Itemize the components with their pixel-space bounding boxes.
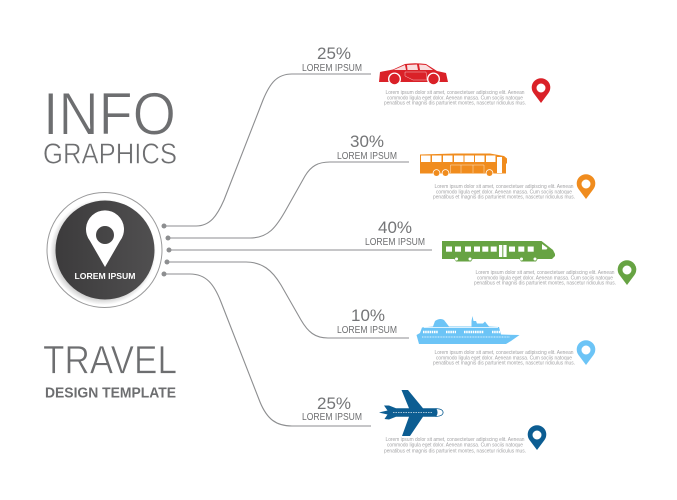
icon: train [442,241,555,262]
item 1: car [302,44,550,106]
description: commodo ligula eget dolor. Aenean massa. Cum sociis natoque [477,275,613,281]
icon: bus [420,154,507,177]
percentage: 25% [317,44,351,63]
item 2: bus [337,132,595,200]
title: INFO GRAPHICS: GRAPHICS [43,138,177,170]
description [384,90,526,106]
description: Lorem ipsum dolor sit amet, consectetuer adipiscing elit. Aenean [386,437,525,443]
icon: green pin [618,260,636,285]
icon: red pin [532,78,550,103]
description: commodo ligula eget dolor. Aenean massa. Cum sociis natoque [387,442,523,448]
label: LOREM IPSUM [302,412,362,423]
label: LOREM IPSUM [302,63,362,74]
description: Lorem ipsum dolor sit amet, consectetuer adipiscing elit. Aenean [386,90,525,96]
icon: ship [416,316,520,344]
icon: car [379,63,448,86]
percentage: 10% [351,306,385,325]
badge label: LOREM IPSUM [74,272,136,281]
description [474,270,616,286]
connector lines [162,74,432,426]
item 3: train [365,218,636,286]
icon: location pin [86,210,124,267]
icon: orange pin [577,174,595,199]
percentage: 30% [350,132,384,151]
description [433,184,575,200]
title: TRAVEL DESIGN TEMPLATE: TRAVEL [43,338,177,382]
label: LOREM IPSUM [337,325,397,336]
description: penatibus et magnis dis parturient montes, nascetur ridiculus mus. [433,194,575,200]
title: TRAVEL DESIGN TEMPLATE: DESIGN TEMPLATE [45,386,176,402]
label: LOREM IPSUM [337,151,397,162]
description: Lorem ipsum dolor sit amet, consectetuer adipiscing elit. Aenean [434,184,574,190]
description: Lorem ipsum dolor sit amet, consectetuer adipiscing elit. Aenean [434,350,574,356]
central badge [47,192,162,308]
description: penatibus et magnis dis parturient montes, nascetur ridiculus mus. [433,360,575,366]
description: penatibus et magnis dis parturient montes, nascetur ridiculus mus. [384,100,526,106]
label: LOREM IPSUM [365,237,425,248]
description: penatibus et magnis dis parturient montes, nascetur ridiculus mus. [384,448,526,454]
percentage: 40% [378,218,412,237]
icon: light blue pin [577,340,595,365]
percentage: 25% [317,394,351,413]
icon: dark blue pin [528,425,546,450]
description: penatibus et magnis dis parturient montes, nascetur ridiculus mus. [474,280,616,286]
description: Lorem ipsum dolor sit amet, consectetuer adipiscing elit. Aenean [476,270,615,276]
title: TRAVEL DESIGN TEMPLATE [43,338,177,402]
description [384,437,526,454]
icon: plane [379,390,444,436]
description: commodo ligula eget dolor. Aenean massa. Cum sociis natoque [436,355,572,361]
item 4: ship [337,306,595,366]
title: INFO GRAPHICS: INFO [43,80,176,148]
item 5: plane [302,390,546,454]
description: commodo ligula eget dolor. Aenean massa. Cum sociis natoque [436,189,572,195]
description [433,350,575,366]
description: commodo ligula eget dolor. Aenean massa. Cum sociis natoque [387,95,523,101]
